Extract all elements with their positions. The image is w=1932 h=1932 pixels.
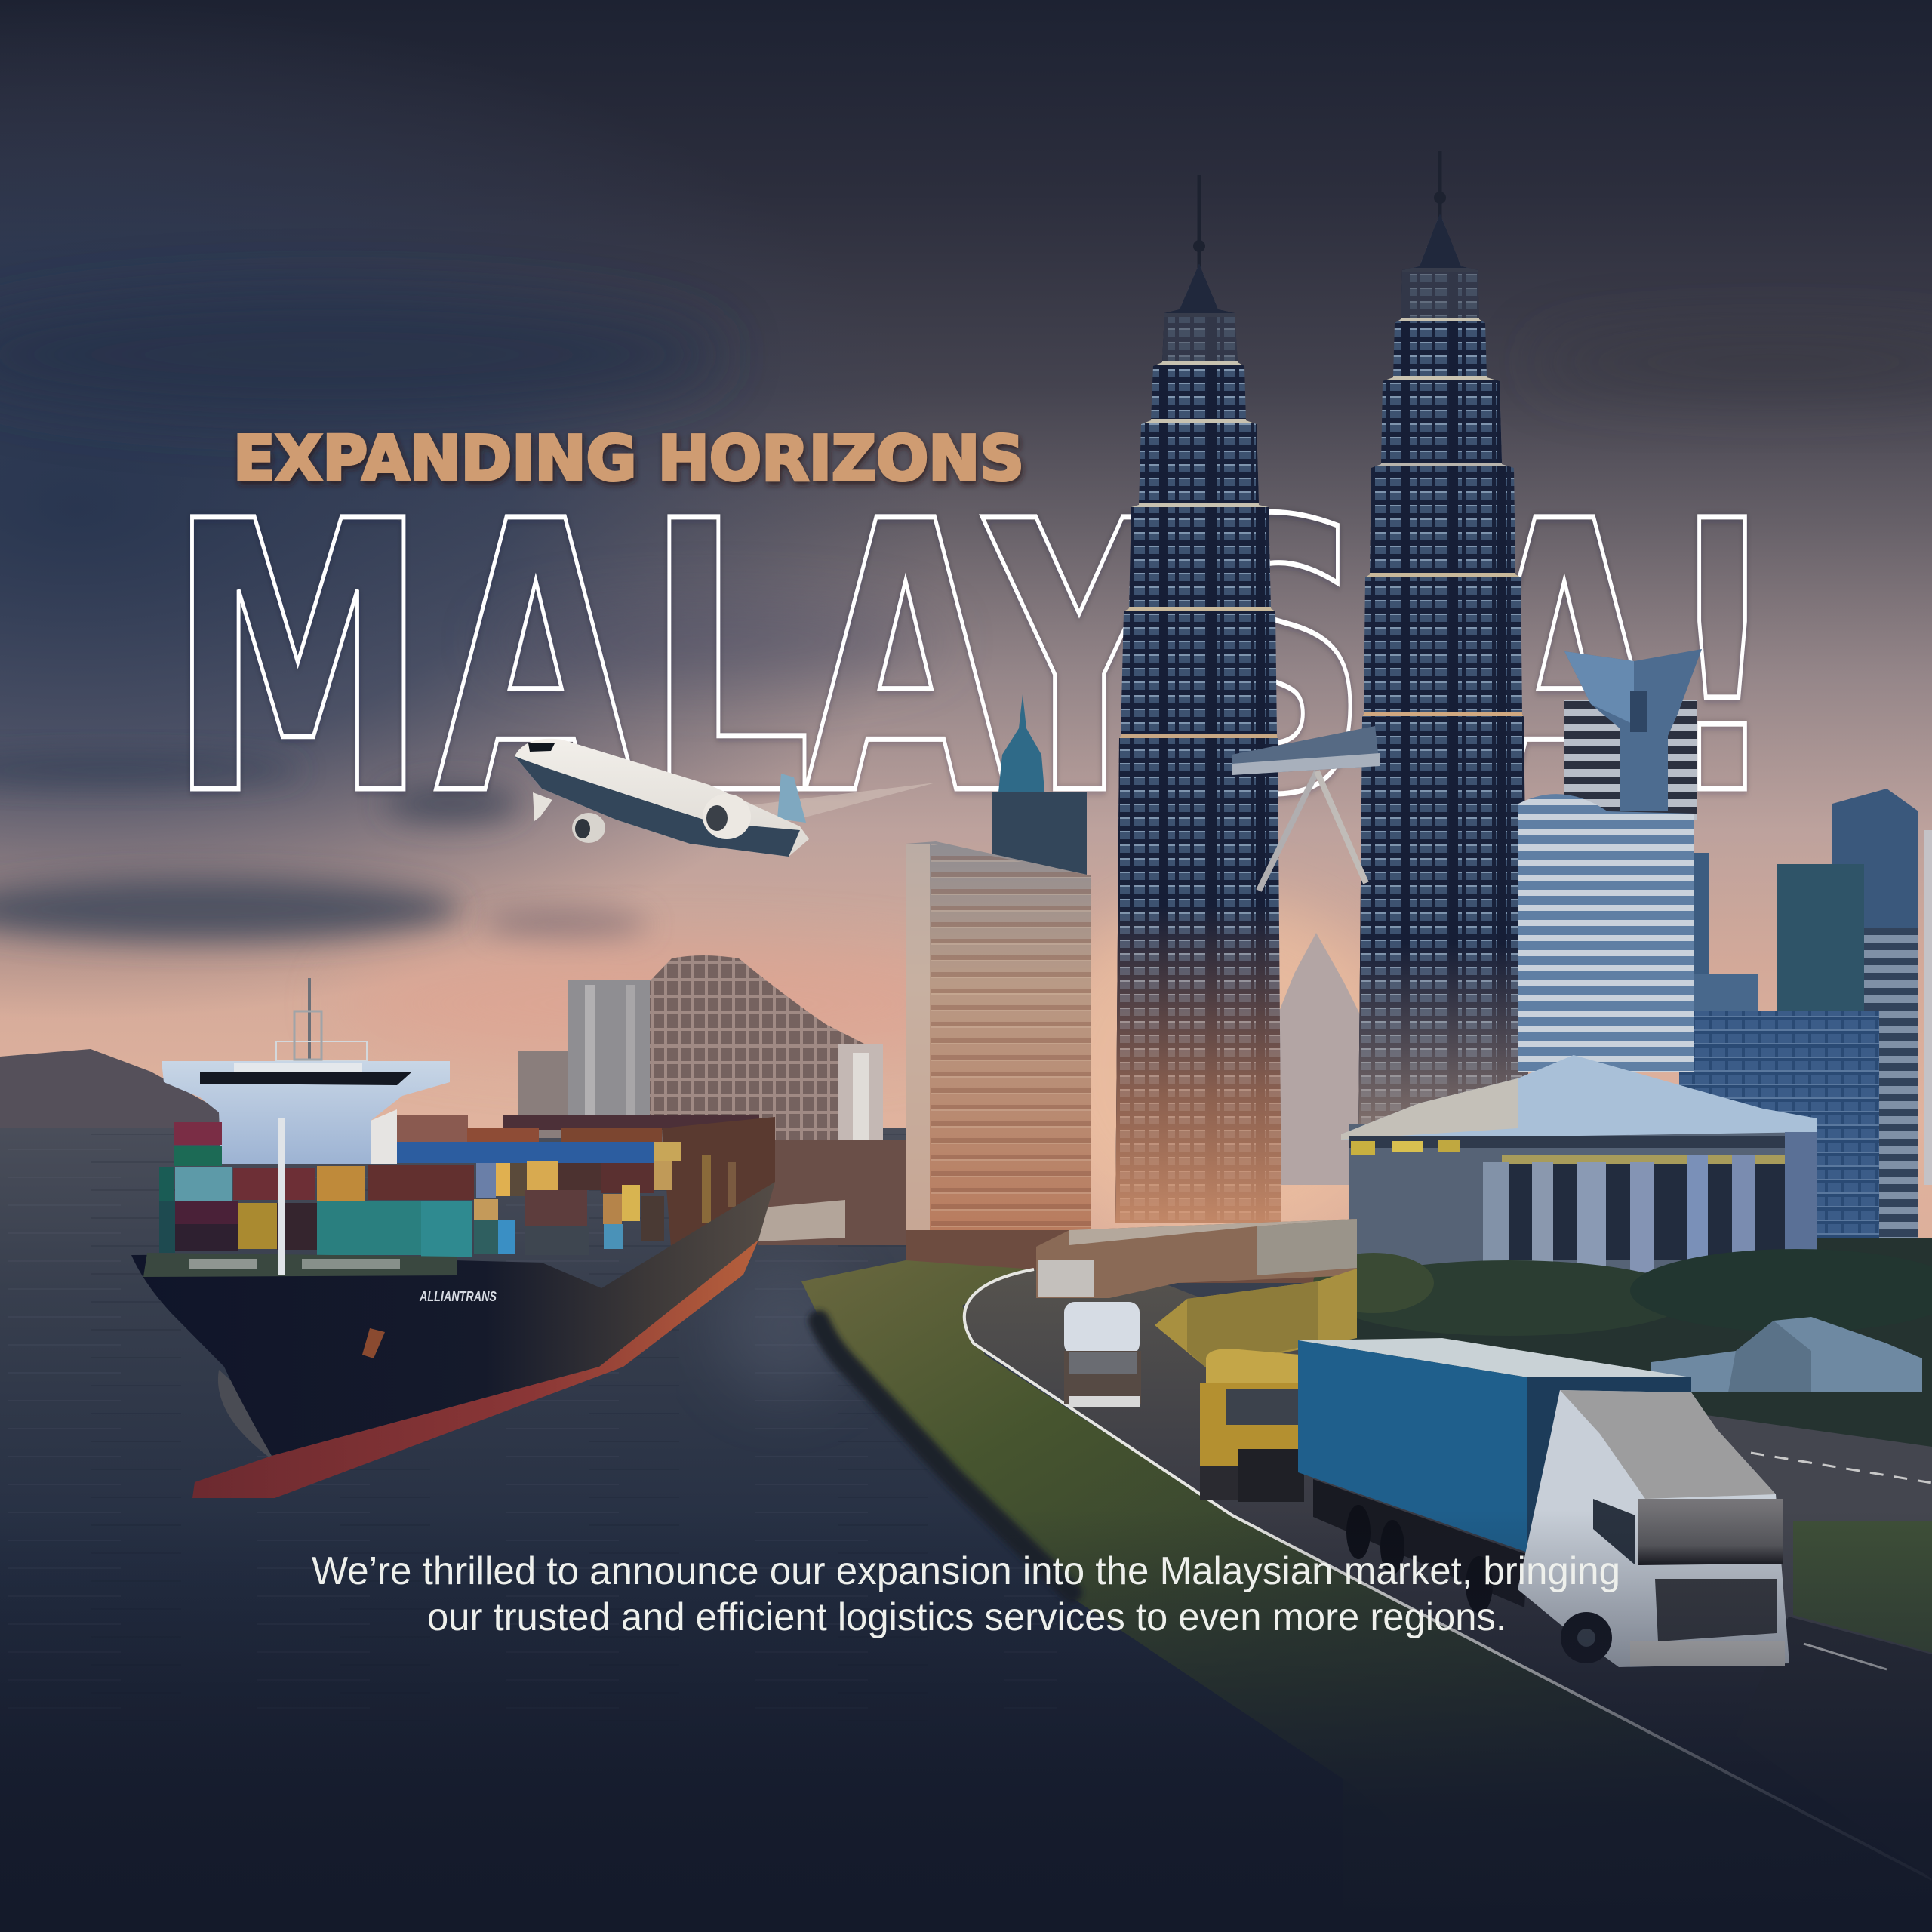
striped blue office tower [1518,794,1694,1072]
distant hill [0,1049,257,1128]
ground and tree base on the right [906,1230,1932,1932]
blue steeple building [992,694,1087,875]
domed government building [1341,1055,1817,1279]
trees behind road [1313,1249,1932,1336]
hull lettering: ALLIANTRANS [419,1289,497,1304]
ship containers [159,1115,775,1257]
twin tower right [1351,151,1532,1136]
headline: outlined Malaysia!: MALAYSIA! [168,442,1782,877]
fuselage [515,739,809,857]
ship mast and railings [276,978,367,1061]
coastal rocks [819,1321,1072,1592]
white truck cab [1518,1390,1789,1667]
highway [964,1269,1932,1879]
engine near [703,794,751,839]
crown tower [1564,649,1702,820]
warehouse and small van [1036,1219,1357,1298]
body text line 1: We’re thrilled to announce our expansion into the Malaysian market, bringing [312,1549,1620,1593]
background pale tower [1279,933,1366,1185]
twin tower left [1109,175,1291,1230]
ship foremast [278,1118,285,1275]
background port building [518,955,883,1143]
airplane [515,739,936,857]
near wing [533,792,552,821]
body text line 2: our trusted and efficient logistics services to even more regions. [427,1595,1506,1639]
container ship [131,978,775,1498]
large tan tower block [906,841,1091,1245]
ship anchor [362,1328,385,1358]
grass verge [801,1260,1932,1932]
white delivery truck [1064,1302,1141,1407]
port shoreline [758,1140,906,1245]
bulbous bow [218,1370,273,1460]
ship hull [131,1182,775,1456]
far right skyline [1679,789,1932,1272]
far wing [743,783,936,823]
tail fin [777,774,806,823]
water [0,1128,1932,1932]
yellow truck [1200,1349,1304,1502]
headline: Expanding Horizons: EXPANDING HORIZONS [233,423,1024,495]
blue semi trailer [1298,1338,1691,1614]
ship deck [143,1253,457,1277]
ship boot stripe [192,1240,758,1498]
yellow warehouse box [1155,1269,1357,1368]
engine far [572,813,605,843]
glass pavilion [1651,1317,1922,1392]
skybridge [1232,726,1380,891]
ship bridge [162,1061,450,1164]
bottom fade overlay [0,1509,1932,1932]
body text [312,1549,1620,1639]
